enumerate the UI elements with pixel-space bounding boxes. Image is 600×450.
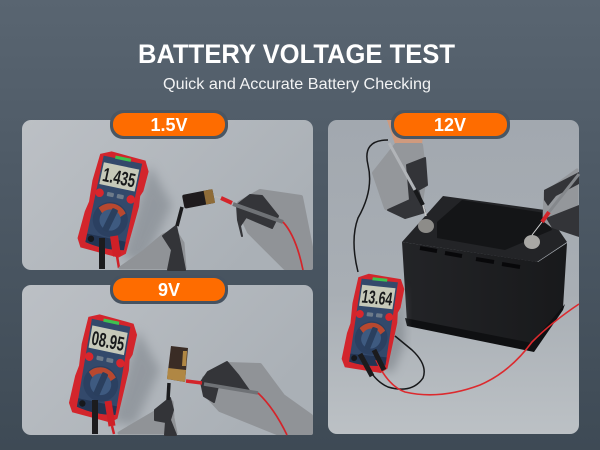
black and red meter leads [102,236,119,269]
label: 1.5V: 1.5V [150,115,188,135]
right hand with red probe [214,191,311,270]
9V battery [167,346,188,382]
black test lead [354,140,388,272]
meter probes [360,350,384,376]
label: 9V [110,275,228,304]
car battery [402,196,567,352]
multimeter reading 1.435 [75,148,151,260]
subtitle: Quick and Accurate Battery Checking [163,76,431,93]
right hand with red probe [186,362,311,435]
meter shadow [122,165,172,262]
left hand with black probe [374,143,427,218]
label: 1.5V [110,110,228,139]
multimeter reading 08.95 [67,311,139,425]
multimeter reading 1.435: 1.435 [101,164,137,192]
label: 12V [391,110,510,139]
panel: 1.5V test [22,120,313,270]
left hand with black probe [120,207,185,270]
red lead [376,304,579,395]
title: BATTERY VOLTAGE TEST [138,39,455,69]
label: 12V: 12V [434,115,466,135]
terminals [418,219,434,233]
arm [387,120,425,144]
panel: 12V test [328,120,579,434]
right hand with red probe [532,170,579,237]
multimeter reading 13.64 [340,272,406,374]
AA battery [182,189,215,209]
black and red meter leads [95,400,114,434]
black lead loop [363,336,424,389]
multimeter reading 08.95: 08.95 [90,327,126,356]
left hand with black probe [119,383,176,435]
panel: 9V test [22,285,313,435]
label: 9V: 9V [158,280,180,300]
multimeter reading 13.64: 13.64 [360,285,394,310]
meter shadow [380,285,404,373]
meter shadow [112,330,160,425]
